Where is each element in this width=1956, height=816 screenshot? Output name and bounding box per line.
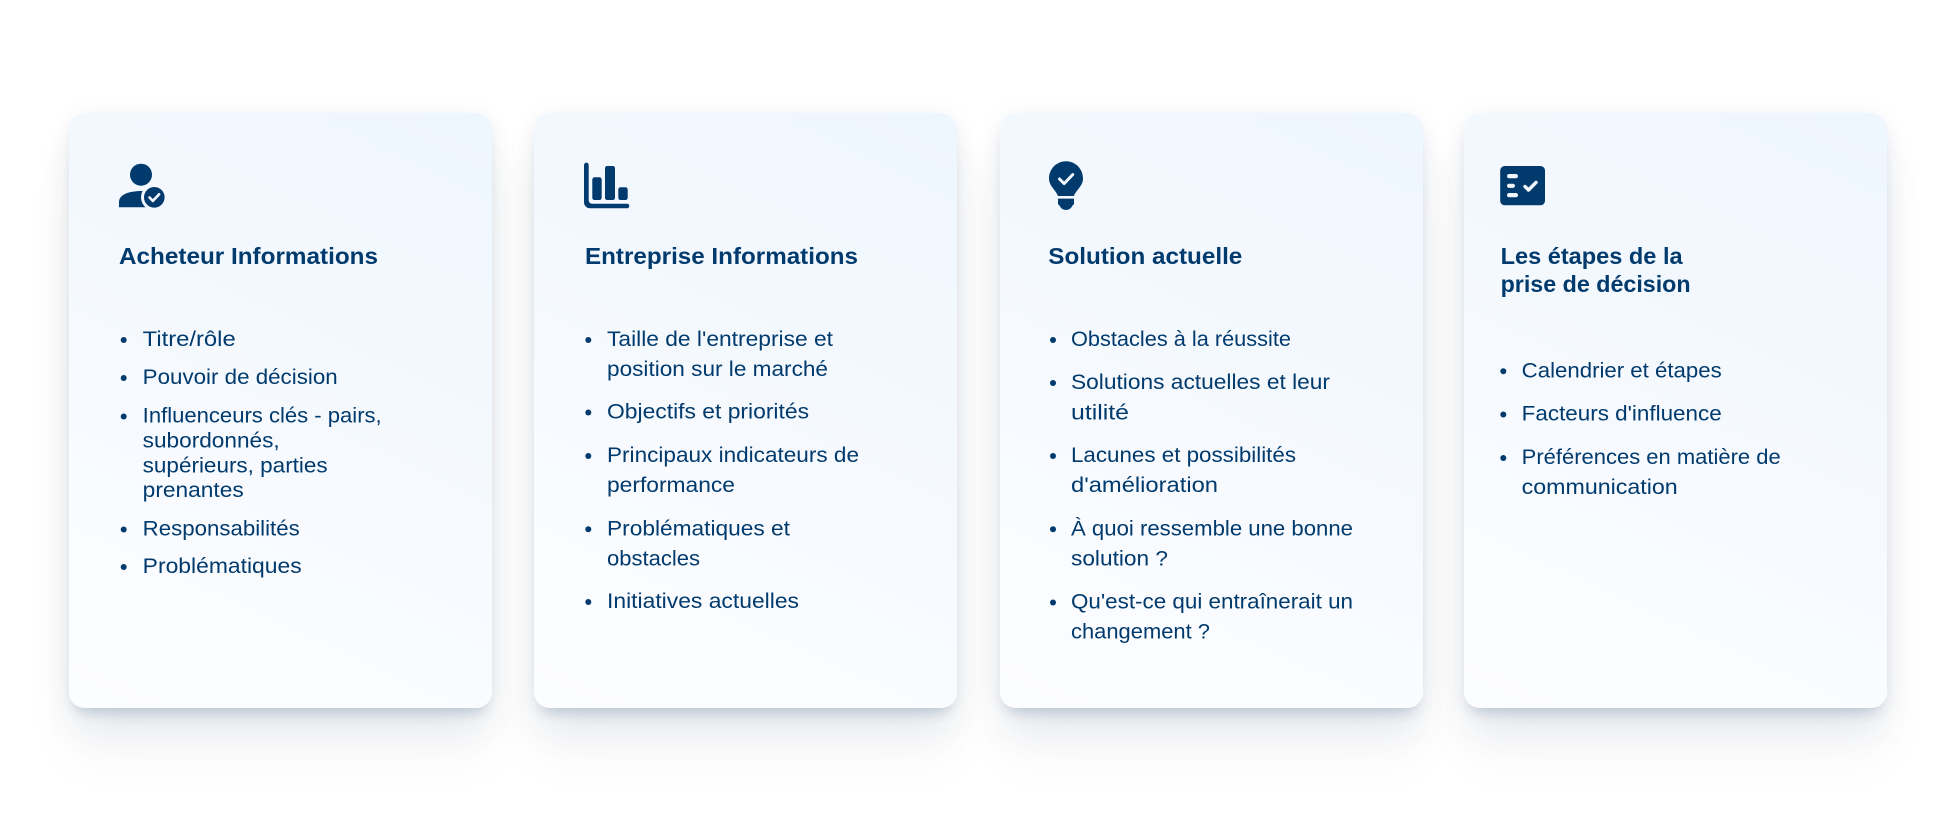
- item: Influenceurs clés: supérieurs, parties: [143, 453, 328, 477]
- list: company information: [585, 327, 859, 613]
- list: current solution: [1050, 327, 1353, 644]
- item: Principaux indicateurs: [585, 443, 859, 497]
- item: À quoi ressemble: À quoi ressemble une bonne: [1071, 515, 1353, 540]
- heading: [1501, 243, 1691, 297]
- item: Problématiques: Problématiques: [143, 554, 302, 578]
- item: Principaux indicateurs: performance: [607, 473, 735, 497]
- icon: checklist: [1500, 166, 1545, 205]
- list: decision steps: [1500, 358, 1781, 499]
- item: Problématiques et obstacles: [585, 516, 790, 570]
- item: Qu'est-ce qui: [1050, 590, 1353, 644]
- heading: Entreprise Informations: [585, 243, 858, 269]
- item: Facteurs d'influence: Facteurs d'influence: [1522, 402, 1722, 426]
- item: Influenceurs clés: [121, 403, 382, 502]
- item: Lacunes et possibilités: Lacunes et possibilités: [1071, 443, 1296, 467]
- item: Responsabilités: Responsabilités: [143, 516, 300, 540]
- icon: bar chart: [584, 163, 629, 208]
- item: Préférences: Préférences en matière de: [1522, 445, 1781, 469]
- item: Influenceurs clés: subordonnés,: [143, 428, 280, 452]
- item: Initiatives actuelles: Initiatives actuelles: [607, 589, 799, 613]
- heading: Solution actuelle: [1048, 243, 1242, 269]
- item: Influenceurs clés: prenantes: [143, 478, 244, 502]
- item: Préférences: communication: [1522, 475, 1678, 499]
- item: Solutions actuelles: [1050, 370, 1330, 424]
- item: À quoi ressemble: [1050, 515, 1353, 570]
- item: Préférences: [1500, 445, 1781, 499]
- heading: prise de décision: [1501, 271, 1691, 297]
- item: Lacunes et possibilités: [1050, 443, 1296, 497]
- item: Taille de l'entreprise: position sur le marché: [607, 357, 828, 381]
- panel: Entreprise Informations: [534, 113, 957, 708]
- item: Taille de l'entreprise: Taille de l'entreprise et: [607, 327, 833, 351]
- list: buyer information: [121, 327, 382, 578]
- heading: Acheteur Informations: [119, 243, 378, 269]
- panel: Les étapes de la prise de décision: [1464, 113, 1887, 708]
- item: Taille de l'entreprise: [585, 327, 833, 381]
- item: Influenceurs clés: Influenceurs clés - pairs,: [143, 403, 382, 427]
- item: Principaux indicateurs: Principaux indicateurs de: [607, 443, 859, 467]
- icon: light bulb with check: [1049, 161, 1083, 210]
- item: Pouvoir de décision: Pouvoir de décision: [143, 365, 338, 389]
- item: Objectifs et priorités: Objectifs et priorités: [607, 400, 809, 424]
- item: Qu'est-ce qui: changement ?: [1071, 620, 1210, 644]
- item: Qu'est-ce qui: Qu'est-ce qui entraînerait un: [1071, 590, 1353, 614]
- heading: Les étapes de la: [1501, 243, 1683, 269]
- item: À quoi ressemble: solution ?: [1071, 546, 1168, 570]
- item: Solutions actuelles: utilité: [1071, 400, 1129, 424]
- item: Calendrier et étapes: Calendrier et étapes: [1522, 358, 1722, 382]
- panel: Solution actuelle: [1000, 113, 1422, 708]
- item: Problématiques et obstacles: Problématiques et: [607, 516, 790, 540]
- panel: Acheteur Informations: [69, 113, 492, 708]
- item: Obstacles à la réussite: Obstacles à la réussite: [1071, 327, 1291, 351]
- item: Titre/rôle: Titre/rôle: [143, 327, 236, 351]
- item: Solutions actuelles: Solutions actuelles et leur: [1071, 370, 1330, 394]
- item: Lacunes et possibilités: d'amélioration: [1071, 473, 1218, 497]
- item: Problématiques et obstacles: obstacles: [607, 546, 700, 570]
- icon: person with check: [119, 164, 168, 211]
